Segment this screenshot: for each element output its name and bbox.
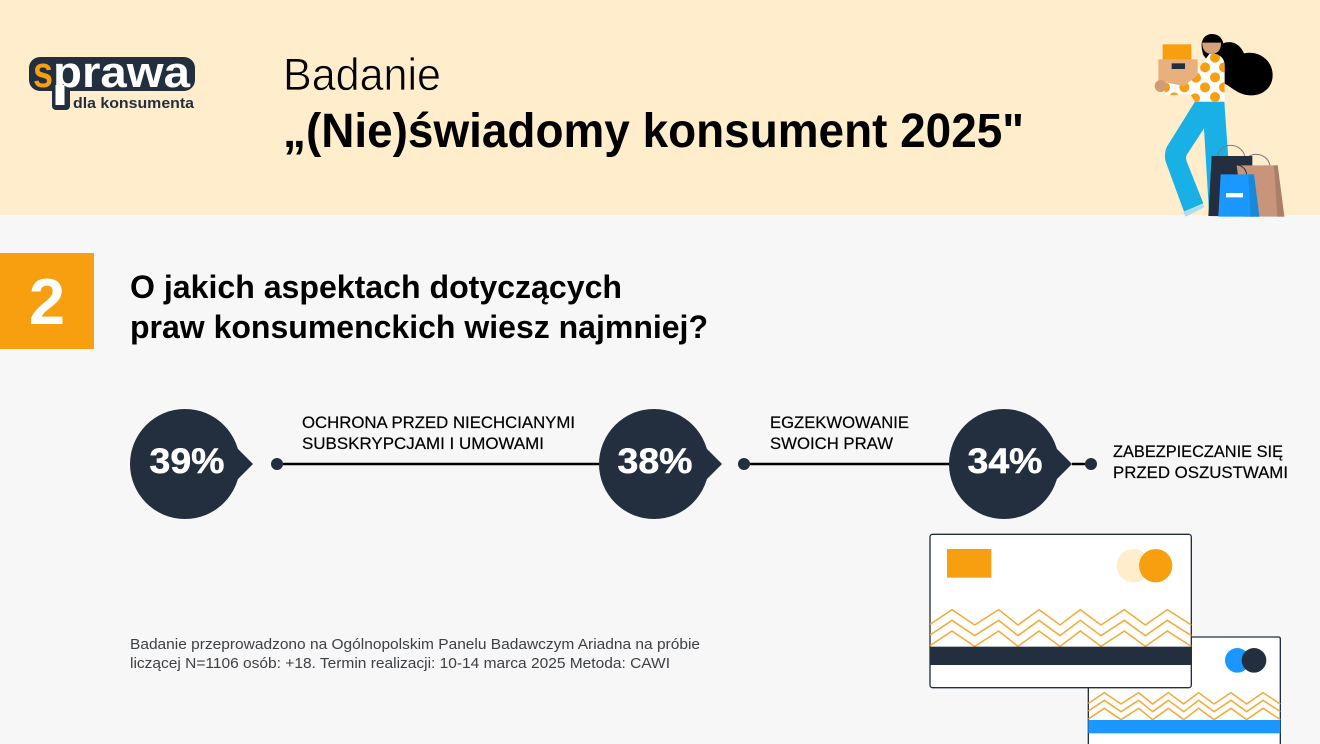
shirt [1164,54,1225,102]
title: Badanie [283,49,441,100]
bag handles [1217,145,1270,165]
lower box [1158,59,1198,86]
stat: 38% [599,409,909,519]
tan bag [1237,165,1284,217]
upper box [1163,44,1191,60]
stat: 34% [949,409,1288,519]
logo: sprawa dla konsumenta [29,48,195,112]
blue bag [1225,165,1247,174]
hand [1155,80,1167,92]
question heading: praw konsumenckich wiesz najmniej? [130,309,708,345]
stat: 38%: 38% [618,442,692,481]
logo: sprawa dla konsumenta: prawa [53,48,191,97]
illustration: front payment card [930,534,1191,688]
methodology note: Badanie przeprowadzono na Ogólnopolskim Panelu Badawczym Ariadna na próbie [130,636,700,653]
card logo circles [1117,549,1150,582]
title [283,49,1024,158]
illustration: woman with box and shopping bags [1155,34,1284,217]
head [1202,43,1221,54]
stat: 39%: OCHRONA PRZED NIECHCIANYMI [302,413,575,432]
methodology note: liczącej N=1106 osób: +18. Termin realizacji: 10-14 marca 2025 Metoda: CAWI [130,655,670,672]
question heading [130,269,708,345]
stat: 38%: EGZEKWOWANIE [770,413,909,432]
section number badge: 2 [29,265,65,338]
title: „(Nie)świadomy konsument 2025" [283,105,1024,158]
stat: 34%: ZABEZPIECZANIE SIĘ [1113,442,1283,461]
methodology note [130,636,700,672]
stat: 39%: 39% [150,442,224,481]
header band [0,0,1320,215]
illustration: back payment card [1088,637,1280,744]
question heading: O jakich aspektach dotyczących [130,269,622,305]
dark stripe [930,647,1191,665]
stat: 39%: SUBSKRYPCJAMI I UMOWAMI [302,434,544,453]
dark bag [1208,156,1252,217]
zigzag pattern [930,610,1191,646]
hair [1202,34,1273,95]
section number badge [0,253,94,349]
stat: 38%: SWOICH PRAW [770,434,893,453]
blue stripe [1088,720,1280,733]
stat: 34%: PRZED OSZUSTWAMI [1113,463,1288,482]
box label [1172,63,1185,69]
logo: sprawa dla konsumenta: s [33,48,53,97]
zigzag pattern [1088,693,1280,720]
card logo circles [1225,648,1250,673]
shirt dots [1164,54,1225,102]
logo: sprawa dla konsumenta: dla konsumenta [73,96,195,112]
stat: 39% [130,409,575,519]
connector lines [277,463,1091,465]
card chip [947,549,991,578]
pants [1165,102,1229,215]
stat: 34%: 34% [968,442,1042,481]
shoe [1183,204,1204,217]
